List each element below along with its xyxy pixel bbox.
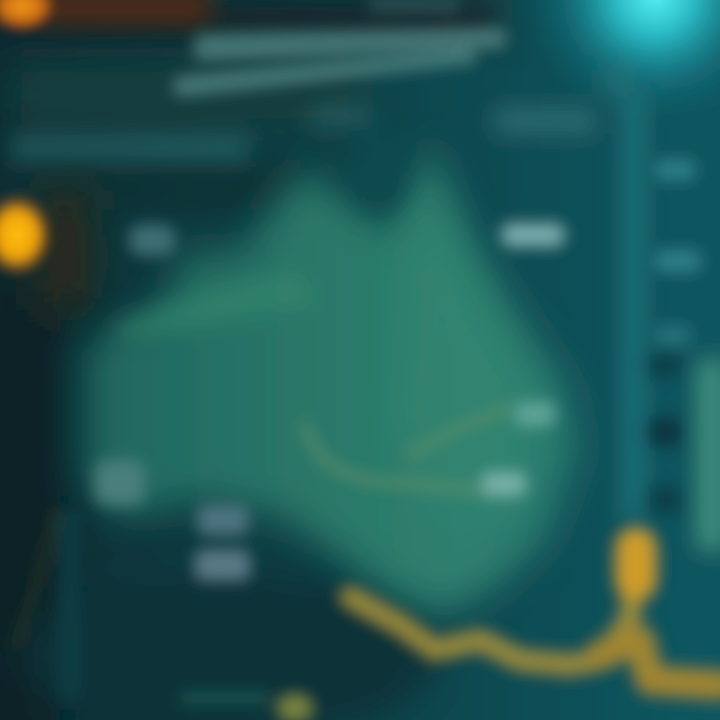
right column: vertical scale <box>622 90 720 550</box>
labels: blurred subheading row <box>10 70 635 161</box>
glow: cyan light top right <box>520 0 720 130</box>
labels: blurred title <box>175 0 505 96</box>
glow: orange light top left <box>0 0 210 32</box>
bottom markers <box>15 510 313 720</box>
map: dark inlet <box>354 128 406 212</box>
labels: blurred map captions <box>95 224 564 580</box>
dark left and bottom shading <box>0 0 500 720</box>
chart: yellow trend line <box>350 548 720 685</box>
map: route line <box>305 408 510 490</box>
glow: yellow light left <box>0 190 90 310</box>
map: green landmass <box>85 145 578 615</box>
